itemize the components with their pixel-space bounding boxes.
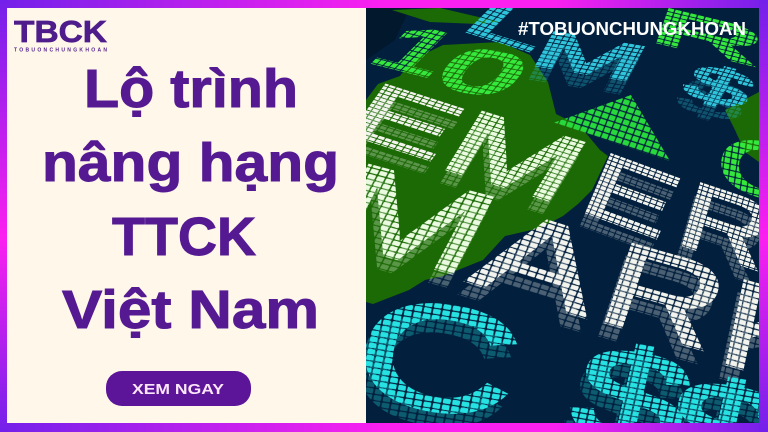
title xyxy=(42,59,339,340)
logo wordmark: TBCK xyxy=(14,14,108,49)
green land mass xyxy=(366,8,759,304)
white letter E: E xyxy=(569,134,693,258)
green up triangle xyxy=(553,95,670,161)
green numeral 1: 1 xyxy=(353,11,482,89)
dark shadow patches xyxy=(366,8,410,60)
cyan dollar sign: $ xyxy=(675,53,764,119)
letter shadows: E xyxy=(563,147,687,271)
title line 1: Lộ trình xyxy=(84,59,298,119)
white lower letter R: R xyxy=(585,216,744,376)
letter shadows: A xyxy=(450,195,620,355)
logo xyxy=(14,14,108,54)
photo: emerging markets LED board xyxy=(366,8,759,423)
letter shadows: $ xyxy=(669,66,758,132)
white letter A: A xyxy=(456,182,626,342)
letter shadows: R xyxy=(579,229,738,389)
title line 3: TTCK xyxy=(112,207,256,267)
white lower letter M: M xyxy=(303,138,519,300)
letter shadows: E xyxy=(323,79,475,190)
title line 2: nâng hạng xyxy=(42,133,339,193)
white letter E: E xyxy=(329,66,481,177)
button: XEM NGAY: XEM NGAY xyxy=(132,382,224,398)
letter shadows xyxy=(366,44,759,423)
title line 4: Việt Nam xyxy=(62,280,319,340)
letter shadows: M xyxy=(419,104,600,234)
cyan letter M: M xyxy=(522,21,657,92)
button: XEM NGAY xyxy=(106,371,251,406)
hashtag: #TOBUONCHUNGKHOAN xyxy=(518,19,746,39)
green numeral 0: 0 xyxy=(421,34,544,110)
white letter M: M xyxy=(425,91,606,221)
logo tagline: TOBUONCHUNGKHOAN xyxy=(14,48,107,54)
letter shadows: M xyxy=(516,34,651,105)
letter shadows: M xyxy=(297,151,513,313)
